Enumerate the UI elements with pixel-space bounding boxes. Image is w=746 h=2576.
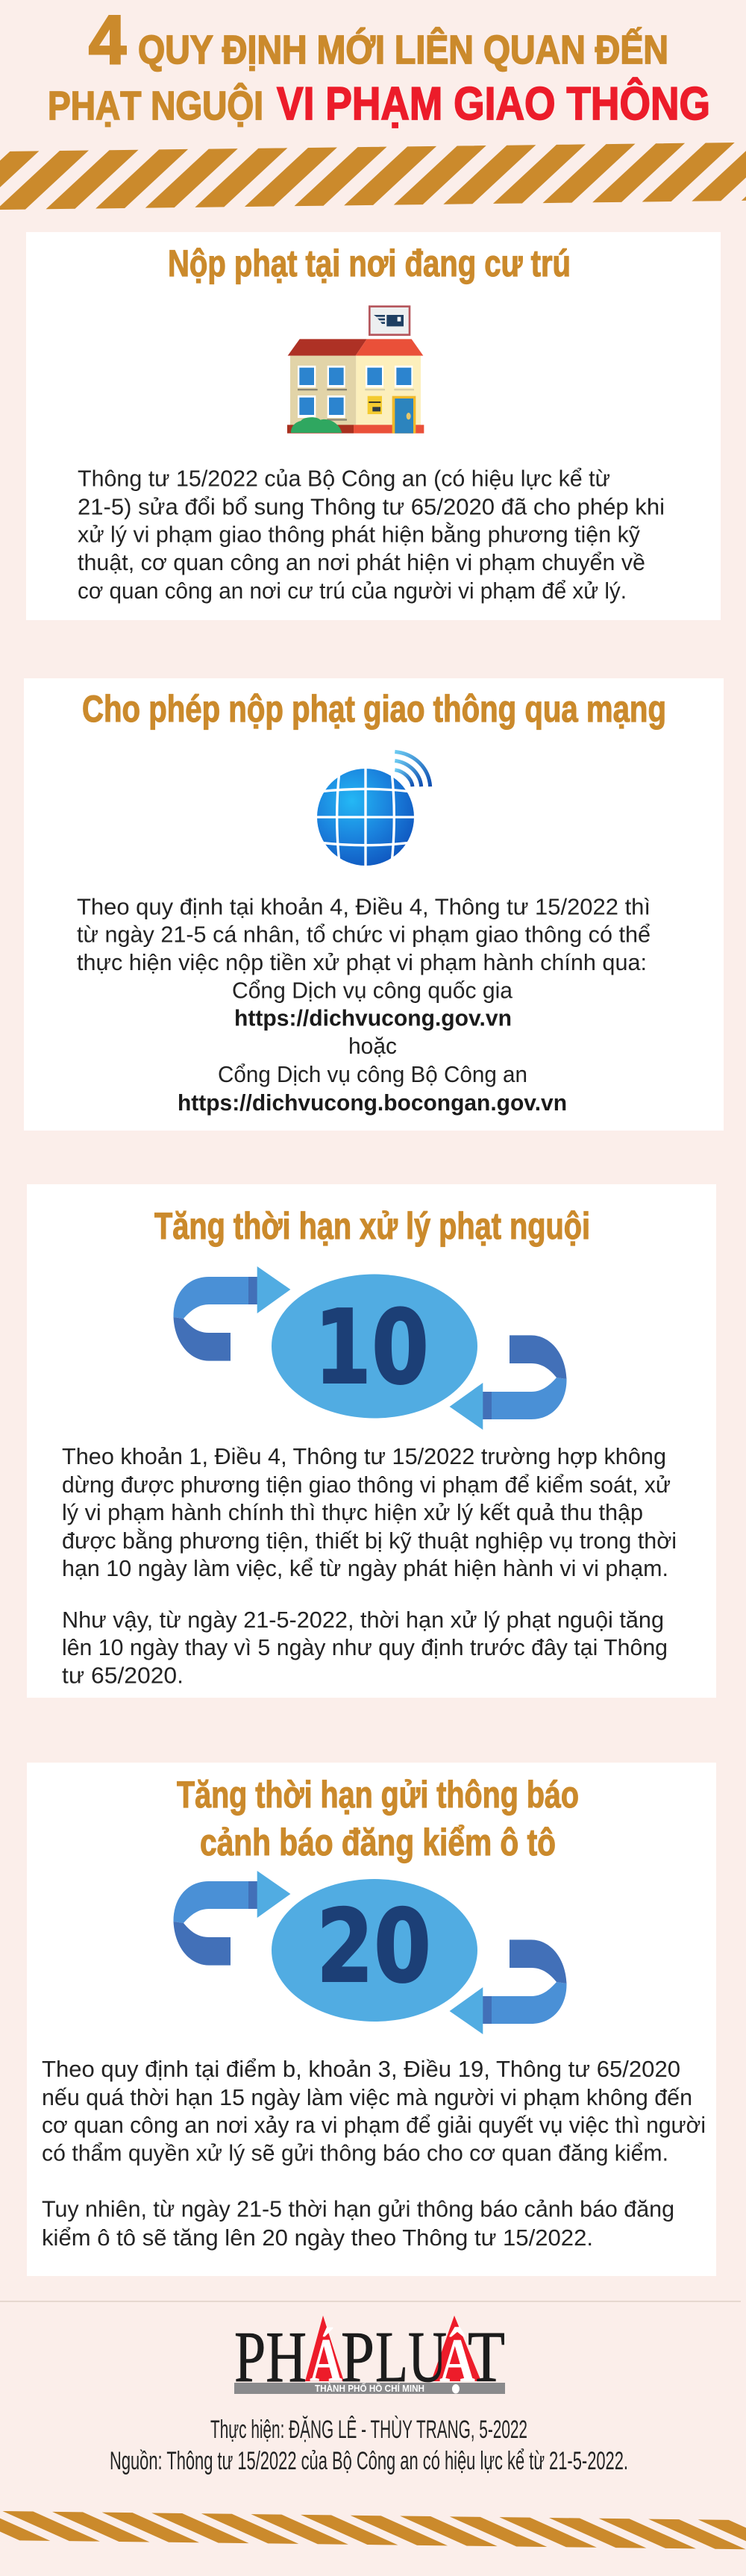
logo: Pháp Luật: P — [341, 2317, 374, 2398]
logo: Pháp Luật: Ậ — [439, 2326, 475, 2395]
body text: qua mạng: thực hiện việc nộp tiền xử phạt vi phạm hành chính qua: — [77, 949, 647, 975]
body text: qua mạng: https://dichvucong.bocongan.gov.vn — [178, 1090, 567, 1116]
body text: nộp phạt: 21-5) sửa đổi bổ sung Thông tư 65/2020 đã cho phép khi — [78, 494, 665, 519]
icon: house with mail sign — [287, 307, 424, 434]
heading: gửi thông báo — [177, 1774, 579, 1863]
number: 10: 10 — [314, 1289, 429, 1407]
body text: qua mạng: Cổng Dịch vụ công Bộ Công an — [218, 1061, 527, 1087]
body text: nộp phạt: thuật, cơ quan công an nơi phát hiện vi phạm chuyển về — [78, 549, 645, 575]
logo: Pháp Luật: Á — [310, 2326, 342, 2395]
panel: nộp phạt tại nơi cư trú — [26, 232, 721, 620]
body text: gửi thông báo — [42, 2056, 706, 2251]
heading: gửi thông báo: cảnh báo đăng kiểm ô tô — [200, 1822, 556, 1863]
arrow: right — [450, 1335, 567, 1430]
panel: tăng thời hạn xử lý — [27, 1184, 716, 1698]
top hazard stripes — [0, 141, 746, 210]
bottom hazard stripes — [0, 2510, 746, 2550]
body text: qua mạng: từ ngày 21-5 cá nhân, tổ chức vi phạm giao thông có thể — [77, 921, 651, 948]
heading: gửi thông báo: Tăng thời hạn gửi thông báo — [177, 1774, 579, 1816]
body text: gửi thông báo: Theo quy định tại điểm b, khoản 3, Điều 19, Thông tư 65/2020 — [42, 2056, 680, 2082]
body text: qua mạng: Cổng Dịch vụ công quốc gia — [232, 978, 513, 1003]
title — [48, 2, 710, 130]
logo: Pháp Luật — [234, 2316, 505, 2398]
body text: xử lý — [62, 1443, 677, 1688]
arrow: left — [173, 1871, 290, 1966]
panel: tăng thời hạn gửi thông báo — [27, 1763, 716, 2276]
title: 4 — [89, 2, 126, 78]
body text: xử lý: được bằng phương tiện, thiết bị kỹ thuật nghiệp vụ trong thời — [62, 1528, 677, 1554]
body text: nộp phạt — [78, 466, 665, 604]
body text: gửi thông báo: nếu quá thời hạn 15 ngày làm việc mà người vi phạm không đến — [42, 2084, 692, 2110]
body text: qua mạng: Theo quy định tại khoản 4, Điều 4, Thông tư 15/2022 thì — [77, 894, 651, 919]
credits: Thực hiện: ĐẶNG LÊ - THÙY TRANG, 5-2022 — [210, 2416, 527, 2444]
title: QUY ĐỊNH MỚI LIÊN QUAN ĐẾN — [138, 27, 668, 72]
body text: nộp phạt: xử lý vi phạm giao thông phát hiện bằng phương tiện kỹ — [78, 521, 640, 548]
icon: arrow cycle with number 20 — [173, 1871, 567, 2034]
body text: qua mạng: hoặc — [348, 1033, 397, 1059]
body text: gửi thông báo: có thẩm quyền xử lý sẽ gửi thông báo cho cơ quan đăng kiểm. — [42, 2140, 668, 2166]
title: PHẠT NGUỘI — [48, 83, 263, 128]
body text: qua mạng — [77, 894, 651, 1116]
body text: gửi thông báo: Tuy nhiên, từ ngày 21-5 thời hạn gửi thông báo cảnh báo đăng — [42, 2195, 674, 2222]
body text: nộp phạt: cơ quan công an nơi cư trú của người vi phạm để xử lý. — [78, 578, 627, 604]
body text: xử lý: lên 10 ngày thay vì 5 ngày như quy định trước đây tại Thông — [62, 1634, 668, 1660]
icon: globe with wifi — [316, 751, 430, 867]
body text: qua mạng: https://dichvucong.gov.vn — [234, 1004, 512, 1031]
arrow: left — [173, 1266, 290, 1361]
body text: xử lý: lý vi phạm hành chính thì thực hiện xử lý kết quả thu thập — [62, 1499, 643, 1525]
logo: Pháp Luật: THÀNH PHỐ HỒ CHÍ MINH — [315, 2383, 424, 2394]
body text: xử lý: Như vậy, từ ngày 21-5-2022, thời hạn xử lý phạt nguội tăng — [62, 1607, 664, 1633]
logo: Pháp Luật: PH — [234, 2317, 307, 2398]
body text: xử lý: hạn 10 ngày làm việc, kể từ ngày phát hiện hành vi vi phạm. — [62, 1555, 668, 1581]
number: 20: 20 — [316, 1888, 431, 2005]
icon: arrow cycle with number 10 — [173, 1266, 567, 1430]
body text: gửi thông báo: kiểm ô tô sẽ tăng lên 20 ngày theo Thông tư 15/2022. — [42, 2225, 593, 2251]
logo: Pháp Luật: T — [468, 2317, 505, 2398]
body text: xử lý: Theo khoản 1, Điều 4, Thông tư 15/2022 trường hợp không — [62, 1443, 666, 1469]
logo: Pháp Luật: LU — [375, 2317, 447, 2398]
heading: xử lý: Tăng thời hạn xử lý phạt nguội — [154, 1205, 590, 1247]
body text: gửi thông báo: cơ quan công an nơi xảy ra vi phạm để giải quyết vụ việc thì người — [42, 2112, 706, 2138]
body text: xử lý: dừng được phương tiện giao thông vi phạm để kiểm soát, xử — [62, 1472, 671, 1498]
credits — [110, 2416, 628, 2475]
body text: nộp phạt: Thông tư 15/2022 của Bộ Công an (có hiệu lực kể từ — [78, 466, 610, 491]
heading: nộp phạt: Nộp phạt tại nơi đang cư trú — [168, 243, 571, 284]
arrow: right — [450, 1939, 567, 2034]
body text: xử lý: tư 65/2020. — [62, 1663, 184, 1688]
panel: nộp phạt qua mạng — [24, 678, 724, 1131]
